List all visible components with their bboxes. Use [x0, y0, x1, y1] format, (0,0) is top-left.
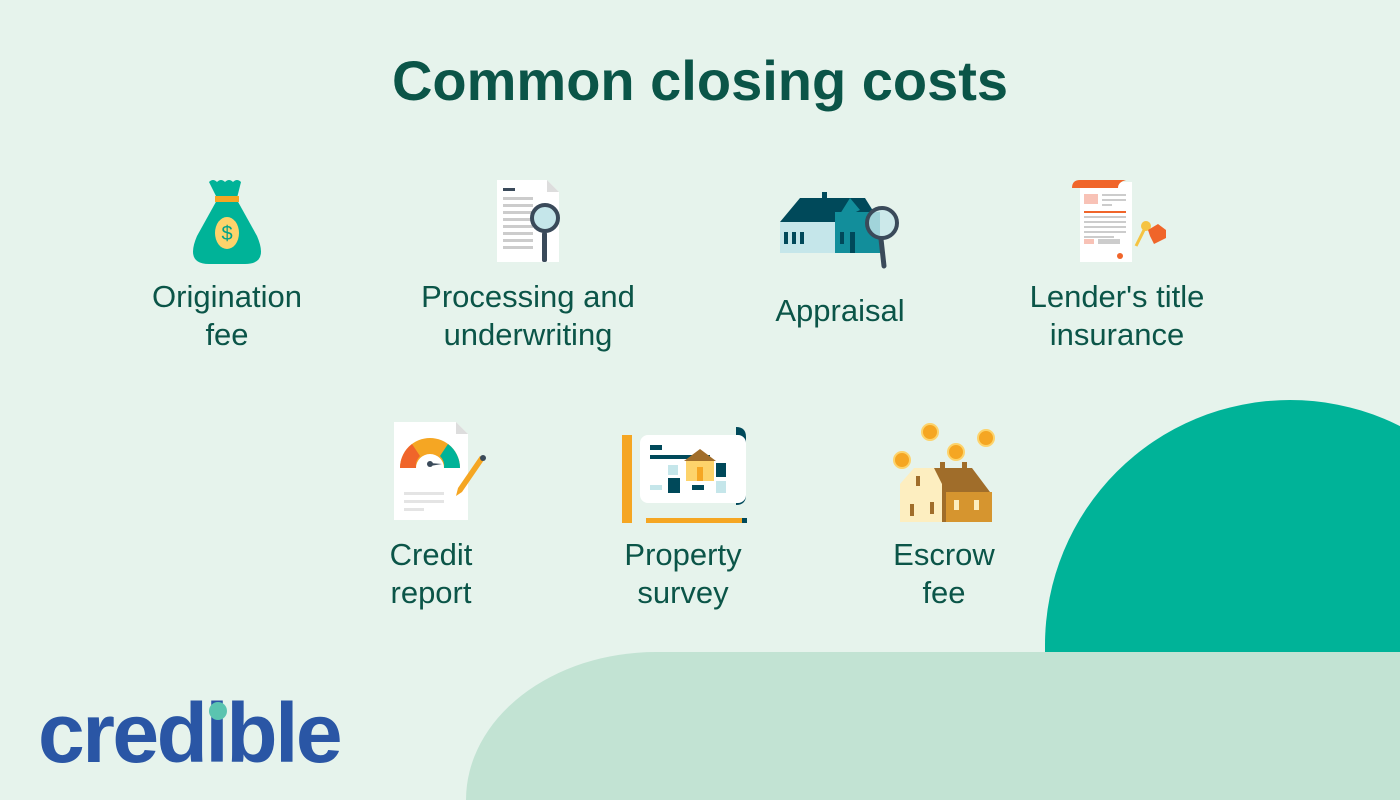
label: escrow fee: [893, 537, 995, 610]
decorative light green shape: [466, 652, 1400, 800]
label: escrow fee: fee: [922, 575, 966, 610]
label: credit report: [390, 537, 472, 610]
label: origination fee: [152, 279, 302, 352]
icon: credit report: [394, 422, 486, 520]
label: origination fee: Origination: [152, 279, 302, 314]
icon: money bag: $: [221, 223, 233, 245]
label: processing and underwriting: underwriting: [444, 317, 612, 352]
label: escrow fee: Escrow: [893, 537, 995, 572]
logo dot: [209, 702, 227, 720]
logo: credible: credible: [38, 686, 340, 780]
icon: property survey blueprint: [622, 427, 747, 523]
label: property survey: Property: [624, 537, 742, 572]
label: credit report: report: [390, 575, 471, 610]
label: appraisal: Appraisal: [775, 293, 905, 328]
label: lender's title insurance: [1030, 279, 1204, 352]
icon: title document with key: [1072, 180, 1166, 262]
label: processing and underwriting: [421, 279, 635, 352]
label: property survey: survey: [637, 575, 729, 610]
icon: money bag: [193, 180, 261, 264]
title: Common closing costs: [392, 49, 1008, 112]
icon: house with magnifier: [780, 192, 899, 268]
label: processing and underwriting: Processing and: [421, 279, 635, 314]
icon: escrow houses with coins: [893, 423, 995, 522]
icon: document with magnifier: [497, 180, 560, 262]
label: origination fee: fee: [205, 317, 249, 352]
label: property survey: [624, 537, 742, 610]
decorative teal circle: [1045, 400, 1400, 800]
label: lender's title insurance: Lender's title: [1030, 279, 1204, 314]
label: credit report: Credit: [390, 537, 472, 572]
label: lender's title insurance: insurance: [1050, 317, 1184, 352]
